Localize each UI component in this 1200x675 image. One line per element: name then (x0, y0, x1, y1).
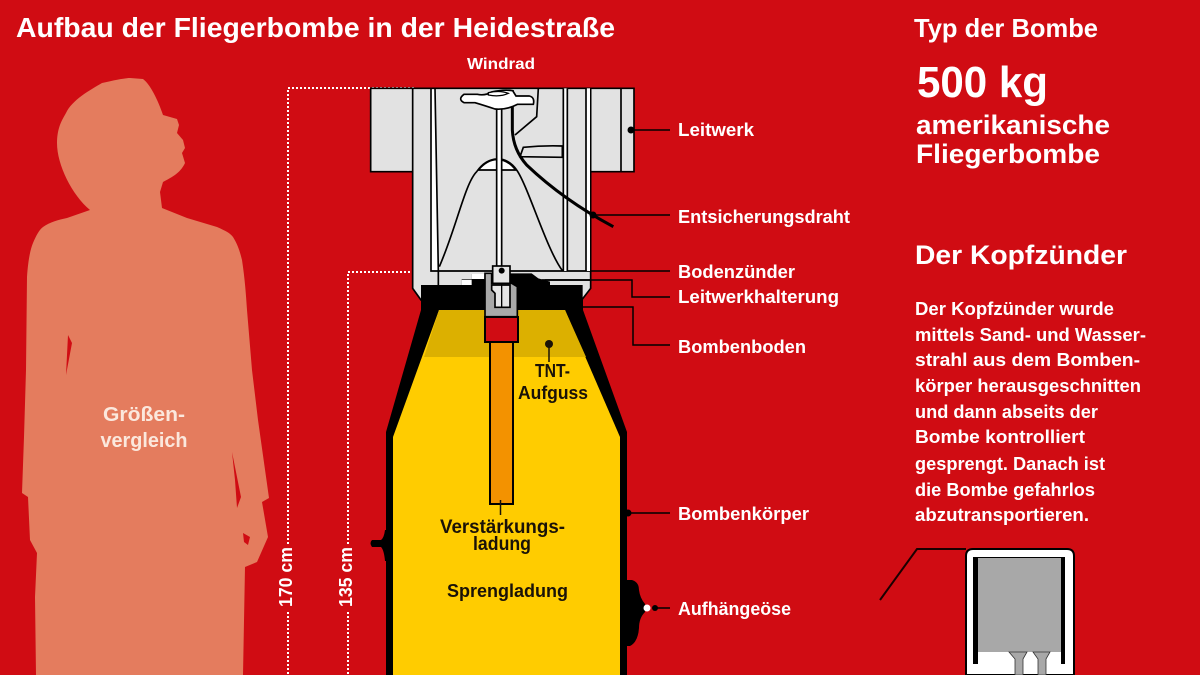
bomb body (370, 285, 645, 675)
paragraph: Kopfzünder: Der Kopfzünder wurde (915, 298, 1114, 319)
shell (386, 285, 627, 675)
tail unit (371, 88, 634, 300)
dimension line: 135 cm: 135 cm (336, 547, 356, 607)
base fuze (485, 273, 517, 317)
cone (439, 159, 563, 271)
label: Bombenkörper: Bombenkörper (678, 504, 809, 524)
human silhouette for size comparison: vergleich (100, 430, 188, 452)
TNT layer (424, 310, 586, 357)
label: Entsicherungsdraht (590, 207, 850, 227)
paragraph: Kopfzünder: Bombe kontrolliert (915, 426, 1085, 447)
dimension line: 170 cm: 170 cm (276, 547, 296, 607)
bomb weight: 500 kg (917, 58, 1048, 107)
paragraph: Kopfzünder: gesprengt. Danach ist (915, 453, 1105, 474)
dimension line: 135 cm (336, 272, 470, 675)
label: Leitwerk (628, 120, 755, 140)
paragraph: Kopfzünder: die Bombe gefahrlos (915, 479, 1095, 500)
label: Bombenboden: Bombenboden (678, 337, 806, 357)
bomb type: amerikanische (916, 110, 1110, 140)
label: Leitwerk: Leitwerk (678, 120, 755, 140)
tail mounting and base plate (421, 266, 583, 317)
paragraph: Kopfzünder: abzutransportieren. (915, 504, 1089, 525)
label: Leitwerkhalterung: Leitwerkhalterung (678, 287, 839, 307)
text in bomb: TNT-Aufguss: Aufguss (518, 383, 588, 403)
human silhouette for size comparison (22, 78, 269, 675)
heading: Der Kopfzünder: Der Kopfzünder (915, 240, 1128, 270)
text in bomb: Sprengladung: Sprengladung (447, 581, 568, 601)
heading: Typ der Bombe: Typ der Bombe (914, 13, 1098, 43)
booster tube (490, 342, 513, 504)
dimension line: 170 cm (276, 88, 414, 675)
callout line to fuze detail (880, 549, 966, 600)
text in bomb: Verstärkungsladung: ladung (473, 534, 531, 555)
arming wire housing (515, 88, 538, 135)
paragraph: Kopfzünder: mittels Sand- und Wasser- (915, 324, 1146, 345)
main explosive (393, 310, 620, 675)
paragraph: Kopfzünder (915, 298, 1146, 525)
paragraph: Kopfzünder: und dann abseits der (915, 401, 1098, 422)
label: Bodenzünder: Bodenzünder (678, 262, 795, 282)
paragraph: Kopfzünder: körper herausgeschnitten (915, 375, 1141, 396)
title: Aufbau der Fliegerbombe in der Heidestraße (16, 12, 615, 43)
bomb type: Fliegerbombe (916, 139, 1100, 169)
silhouette label: Größen- (103, 404, 185, 426)
label: Entsicherungsdraht: Entsicherungsdraht (678, 207, 850, 227)
shaft (497, 108, 502, 267)
text in bomb: Verstärkungsladung (440, 500, 565, 555)
small rivet at body (624, 510, 632, 516)
label: Aufhängeöse: Aufhängeöse (678, 599, 791, 619)
red fuze well (485, 317, 518, 342)
paragraph: Kopfzünder: strahl aus dem Bomben- (915, 349, 1140, 370)
label: Leitwerkhalterung (545, 280, 839, 307)
suspension lug right (622, 580, 645, 646)
bomb type (916, 110, 1110, 169)
fins (371, 88, 634, 300)
text in bomb: Verstärkungsladung: Verstärkungs- (440, 517, 565, 538)
slots (431, 88, 438, 271)
text in bomb: TNT-Aufguss (518, 340, 588, 403)
text in bomb: TNT-Aufguss: TNT- (535, 361, 570, 381)
label: Bombenboden (582, 307, 806, 357)
label: Windrad: Windrad (467, 56, 535, 73)
suspension lug left (370, 530, 390, 561)
arming wire (512, 90, 613, 227)
wind vane (461, 90, 534, 109)
fuze detail illustration (966, 549, 1074, 675)
